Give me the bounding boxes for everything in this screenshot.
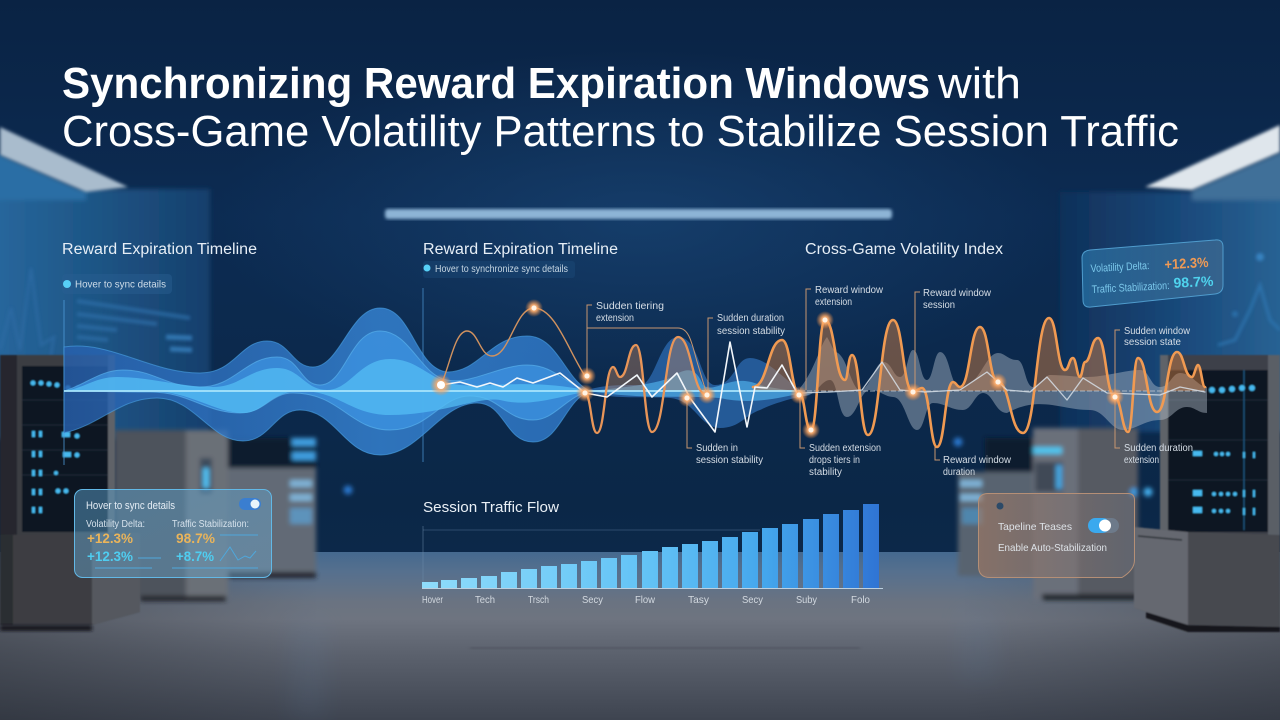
- callout labels: Reward window: [923, 288, 992, 299]
- bar chart axis labels: [422, 594, 870, 606]
- panel: tiered toggle bottom right: [978, 494, 1134, 578]
- callout labels: Sudden tiering: [596, 301, 664, 312]
- bar chart axis labels: Tasy: [688, 594, 710, 606]
- callout labels: session: [923, 300, 955, 311]
- sparkline: [95, 535, 258, 568]
- panel: hover to sync details bottom left: +12.3%: [87, 530, 134, 546]
- panel: tiered toggle bottom right: Enable Auto-Stabilization: [998, 542, 1107, 554]
- callout labels: Sudden duration: [1124, 443, 1193, 454]
- heading: cross-game volatility index: Cross-Game Volatility Index: [805, 241, 1003, 258]
- bar chart axis labels: Trsch: [528, 594, 549, 606]
- panel: hover to sync details bottom left: Traffic Stabilization:: [172, 519, 249, 530]
- server racks right: [954, 355, 1280, 632]
- hover hint left: Hover to sync details: [75, 278, 166, 290]
- bar chart axis labels: Secy: [742, 594, 764, 606]
- callout labels: session stability: [717, 326, 785, 337]
- panel: volatility delta top right: [1082, 240, 1223, 307]
- panel: hover to sync details bottom left: Volatility Delta:: [86, 519, 145, 530]
- panel: hover to sync details bottom left: [74, 490, 272, 578]
- bar chart axis labels: Secy: [582, 594, 604, 606]
- callout labels: Reward window: [943, 455, 1012, 466]
- panel: volatility delta top right: 98.7%: [1173, 273, 1214, 291]
- leader lines and callout connectors: [587, 289, 1120, 460]
- toggle switch: [1088, 518, 1119, 533]
- callout labels: extension: [815, 297, 852, 308]
- hover hint center: Hover to synchronize sync details: [435, 264, 568, 275]
- callout labels: stability: [809, 467, 842, 478]
- panel: tiered toggle bottom right: Tapeline Teases: [998, 521, 1072, 533]
- panel: hover to sync details bottom left: 98.7%: [176, 530, 216, 546]
- panel: volatility delta top right: Volatility Delta:: [1090, 260, 1150, 275]
- panel: volatility delta top right: +12.3%: [1164, 254, 1209, 272]
- hover hint left: [62, 274, 172, 294]
- heading: reward expiration timeline center: Reward Expiration Timeline: [423, 241, 618, 258]
- callout labels: [596, 285, 1193, 478]
- bar chart axis labels: Tech: [475, 594, 495, 606]
- toggle switch: [239, 498, 261, 510]
- panel: hover to sync details bottom left: Hover to sync details: [86, 500, 175, 512]
- callout labels: session state: [1124, 337, 1181, 348]
- callout labels: Reward window: [815, 285, 884, 296]
- decorative wall charts: [0, 253, 1280, 360]
- bar chart axis labels: Suby: [796, 594, 818, 606]
- wave chart: reward expiration: [64, 288, 1207, 465]
- callout labels: Sudden duration: [717, 313, 784, 324]
- ceiling light strips: [0, 125, 1280, 219]
- title: Synchronizing Reward Expiration Windows: [62, 59, 930, 108]
- panel: hover to sync details bottom left: +12.3%: [87, 548, 134, 564]
- title: with: [937, 59, 1021, 108]
- bar chart: session traffic flow: [422, 504, 883, 588]
- panel: volatility delta top right: Traffic Stabilization:: [1091, 280, 1170, 296]
- title: [62, 59, 1179, 156]
- server racks left: [0, 355, 352, 631]
- heading: reward expiration timeline left: Reward Expiration Timeline: [62, 241, 257, 258]
- callout labels: extension: [1124, 455, 1159, 466]
- volatility lines: [441, 308, 1205, 447]
- panel: hover to sync details bottom left: +8.7%: [176, 548, 215, 564]
- bar chart axis labels: Hover: [422, 594, 443, 606]
- callout labels: Sudden in: [696, 443, 738, 454]
- callout labels: session stability: [696, 455, 763, 466]
- heading: session traffic flow: Session Traffic Flow: [423, 499, 559, 516]
- bar chart axis labels: Folo: [851, 594, 870, 606]
- title: Cross-Game Volatility Patterns to Stabilize Session Traffic: [62, 107, 1179, 156]
- callout labels: drops tiers in: [809, 455, 860, 466]
- callout labels: duration: [943, 467, 975, 478]
- callout labels: extension: [596, 313, 634, 324]
- bar chart axis labels: Flow: [635, 594, 655, 606]
- callout labels: Sudden extension: [809, 443, 881, 454]
- glowing event nodes: [430, 299, 1124, 439]
- callout labels: Sudden window: [1124, 326, 1191, 337]
- hover hint center: [423, 261, 575, 278]
